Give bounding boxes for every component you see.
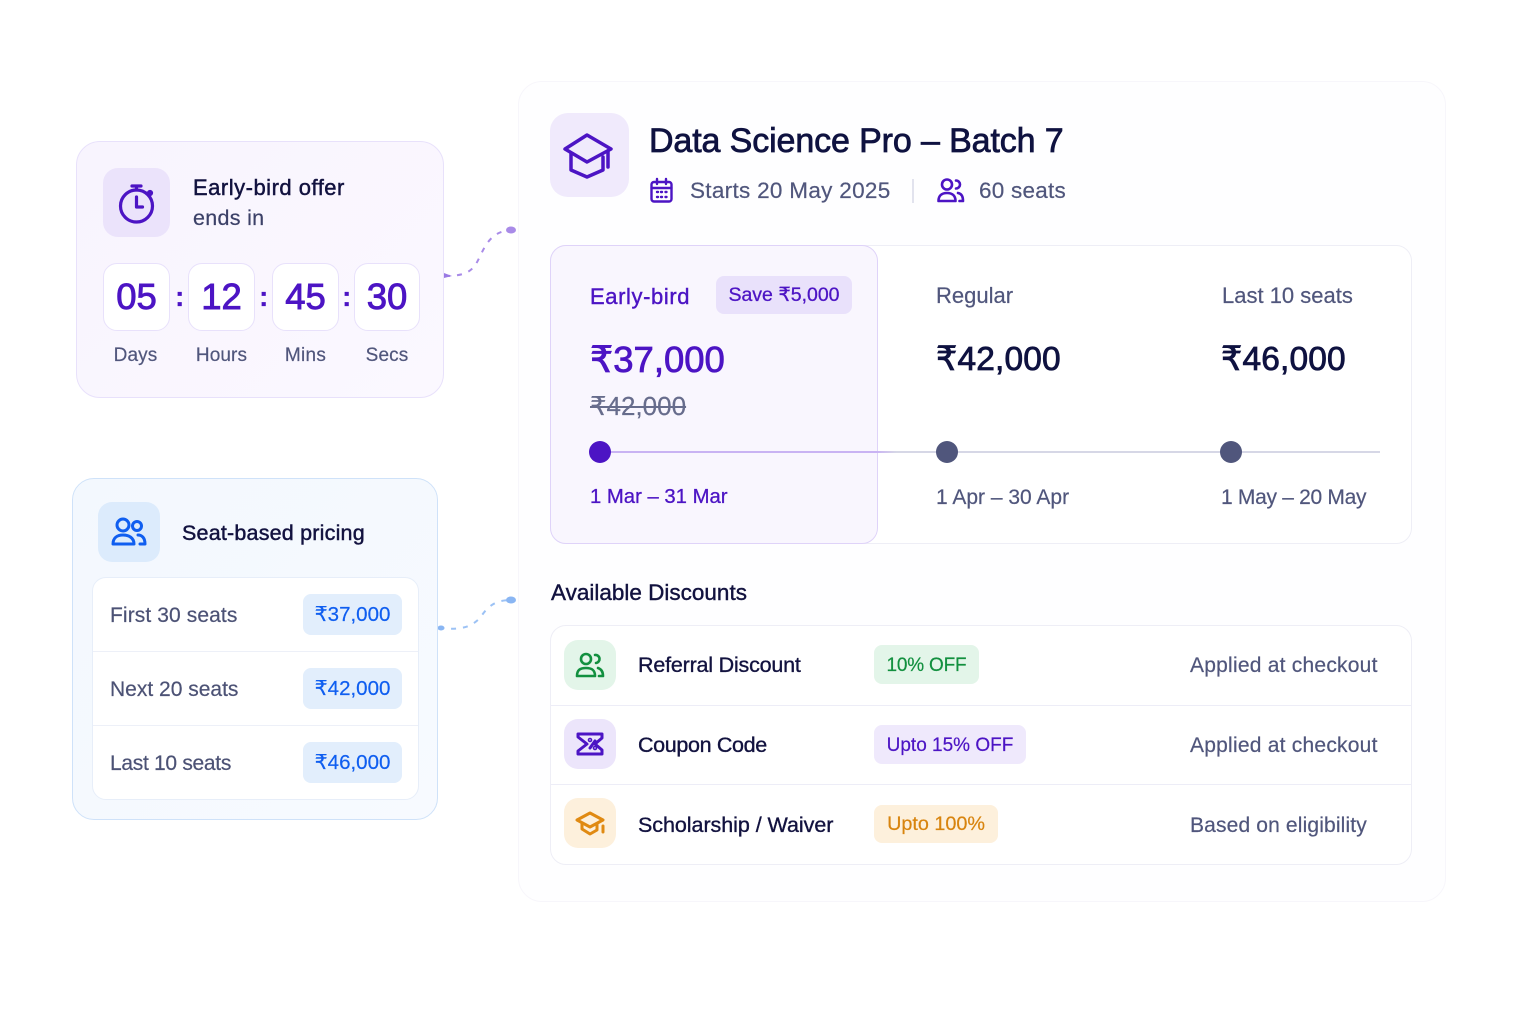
countdown: hours: 12 xyxy=(201,276,242,317)
row: last 10 seats xyxy=(110,742,402,783)
heading: early-bird offer: Early-bird offer xyxy=(193,175,345,200)
badge: upto 100%: Upto 100% xyxy=(887,813,985,835)
timeline dot: early-bird xyxy=(589,441,611,463)
price chip: ₹46,000 xyxy=(315,751,390,774)
panel: seat-based pricing xyxy=(72,478,438,820)
label: Last 10 seats xyxy=(110,752,231,775)
table: seat tiers xyxy=(92,577,419,800)
separator: : xyxy=(259,281,268,312)
text: seats count: 60 seats xyxy=(979,178,1066,203)
note: Applied at checkout xyxy=(1190,734,1378,757)
countdown: days: 05 xyxy=(116,276,157,317)
panel: pricing tiers xyxy=(550,245,1412,544)
badge: save xyxy=(716,276,852,314)
timeline dot: regular xyxy=(936,441,958,463)
label: regular: Regular xyxy=(936,283,1013,308)
text: ends in: ends in xyxy=(193,206,264,230)
name: Referral Discount xyxy=(638,653,801,677)
countdown: seconds xyxy=(354,263,420,331)
panel: discounts table xyxy=(550,625,1412,865)
icon: seats xyxy=(937,178,964,202)
date range: regular: 1 Apr – 30 Apr xyxy=(936,486,1069,509)
label: early-bird: Early-bird xyxy=(590,284,690,309)
icon: stopwatch xyxy=(103,168,170,237)
countdown: minutes: 45 xyxy=(285,276,326,317)
row: next 20 seats xyxy=(93,652,418,726)
date range: last 10 seats: 1 May – 20 May xyxy=(1221,486,1366,509)
panel: early-bird countdown xyxy=(76,141,444,398)
price: last 10 seats: ₹46,000 xyxy=(1221,341,1346,378)
price: early-bird: ₹37,000 xyxy=(590,339,725,380)
badge: upto 15% off xyxy=(874,725,1026,764)
badge: save: Save ₹5,000 xyxy=(728,284,840,306)
icon: coupon xyxy=(564,719,616,769)
icon: graduation cap xyxy=(550,113,629,197)
price chip: ₹42,000 xyxy=(315,677,390,700)
timeline dot: last 10 seats xyxy=(1220,441,1242,463)
price chip: ₹37,000 xyxy=(315,603,390,626)
price chip xyxy=(303,668,402,709)
panel: early-bird tier xyxy=(550,245,878,544)
countdown: hours xyxy=(188,263,255,331)
heading: available discounts: Available Discounts xyxy=(551,580,747,605)
row: scholarship / waiver xyxy=(564,798,1367,848)
countdown: seconds: 30 xyxy=(367,276,407,317)
separator: : xyxy=(175,281,184,312)
label: Next 20 seats xyxy=(110,678,238,701)
badge: 10% off: 10% OFF xyxy=(887,655,966,676)
price: crossed out: ₹42,000 xyxy=(590,391,686,421)
icon: scholarship xyxy=(564,798,616,848)
note: Based on eligibility xyxy=(1190,814,1367,837)
countdown: minutes xyxy=(272,263,339,331)
row: referral discount xyxy=(551,626,1411,706)
icon: referral xyxy=(564,640,616,690)
price chip xyxy=(303,742,402,783)
label: First 30 seats xyxy=(110,604,237,627)
label: hours: Hours xyxy=(196,345,247,366)
label: days: Days xyxy=(114,345,157,366)
badge: 10% off xyxy=(874,645,979,684)
row: first 30 seats xyxy=(93,578,418,652)
timeline line xyxy=(600,451,1380,453)
badge: upto 100% xyxy=(874,805,998,843)
label: secs: Secs xyxy=(366,345,408,366)
panel: course card xyxy=(518,81,1446,902)
icon: calendar xyxy=(650,178,673,203)
heading: seat-based pricing: Seat-based pricing xyxy=(182,521,365,545)
price: regular: ₹42,000 xyxy=(936,341,1061,378)
divider xyxy=(912,179,914,203)
row: coupon code xyxy=(551,706,1411,785)
price chip xyxy=(303,594,402,635)
label: last 10 seats: Last 10 seats xyxy=(1222,283,1353,308)
countdown: days xyxy=(103,263,170,331)
title: Data Science Pro – Batch 7 xyxy=(649,122,1064,160)
label: mins: Mins xyxy=(285,345,326,366)
badge: upto 15% off: Upto 15% OFF xyxy=(887,735,1013,756)
name: Scholarship / Waiver xyxy=(638,813,833,837)
note: Applied at checkout xyxy=(1190,654,1378,677)
separator: : xyxy=(342,281,351,312)
name: Coupon Code xyxy=(638,733,767,757)
icon: seat users xyxy=(98,502,160,562)
date range: early-bird: 1 Mar – 31 Mar xyxy=(590,486,728,508)
text: start date: Starts 20 May 2025 xyxy=(690,178,891,203)
